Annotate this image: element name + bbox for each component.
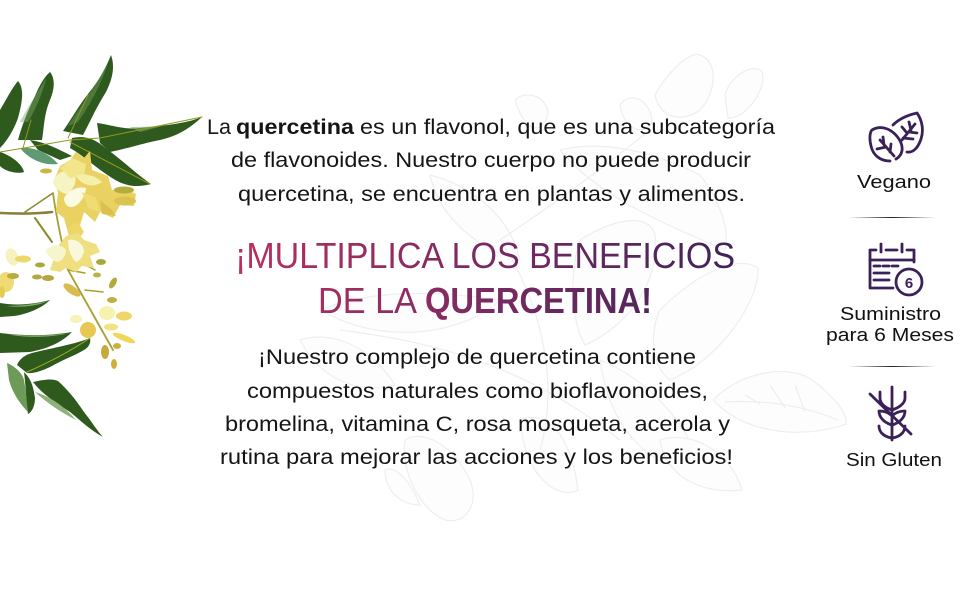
stems and veins xyxy=(0,95,202,372)
body text: rutina para mejorar las acciones y los beneficios! xyxy=(220,446,733,469)
left edge cluster xyxy=(3,246,21,268)
heading xyxy=(235,235,735,321)
icon: leaves xyxy=(870,113,922,161)
icon number: 6 xyxy=(905,275,913,292)
heading: QUERCETINA! xyxy=(425,280,652,321)
intro text: quercetina, se encuentra en plantas y alimentos. xyxy=(238,183,745,206)
body text: compuestos naturales como bioflavonoides, xyxy=(247,380,708,403)
label: Suministro xyxy=(840,303,941,324)
intro text: La xyxy=(207,116,231,139)
lower cluster xyxy=(99,306,115,320)
feature: suministro para 6 meses xyxy=(826,244,954,345)
heading: ¡MULTIPLICA LOS BENEFICIOS xyxy=(235,235,735,276)
feature: suministro para 6 meses: para 6 Meses xyxy=(826,324,954,345)
background line art: botanical watermark xyxy=(300,54,846,521)
yellow flower clusters xyxy=(0,151,136,369)
body text: bromelina, vitamina C, rosa mosqueta, acerola y xyxy=(225,413,731,436)
label: Sin Gluten xyxy=(846,449,942,470)
body text xyxy=(220,346,733,469)
divider xyxy=(848,217,936,218)
intro text: quercetina xyxy=(236,116,354,139)
feature: sin gluten xyxy=(846,387,942,470)
leaves xyxy=(0,55,202,437)
intro text xyxy=(207,116,775,206)
intro text: de flavonoides. Nuestro cuerpo no puede producir xyxy=(231,149,751,172)
icon: crossed wheat xyxy=(870,387,911,440)
upper cluster xyxy=(54,151,136,240)
divider xyxy=(848,366,936,367)
lighter leaf faces xyxy=(6,62,170,420)
label: Vegano xyxy=(857,171,931,192)
middle cluster xyxy=(68,222,84,240)
illustration: quercetin plant branch xyxy=(0,55,202,437)
intro text: es un flavonol, que es una subcategoría xyxy=(360,116,775,139)
heading: DE LA xyxy=(318,280,417,321)
feature: vegano xyxy=(857,113,931,192)
body text: ¡Nuestro complejo de quercetina contiene xyxy=(258,346,696,369)
icon: calendar xyxy=(870,244,922,295)
